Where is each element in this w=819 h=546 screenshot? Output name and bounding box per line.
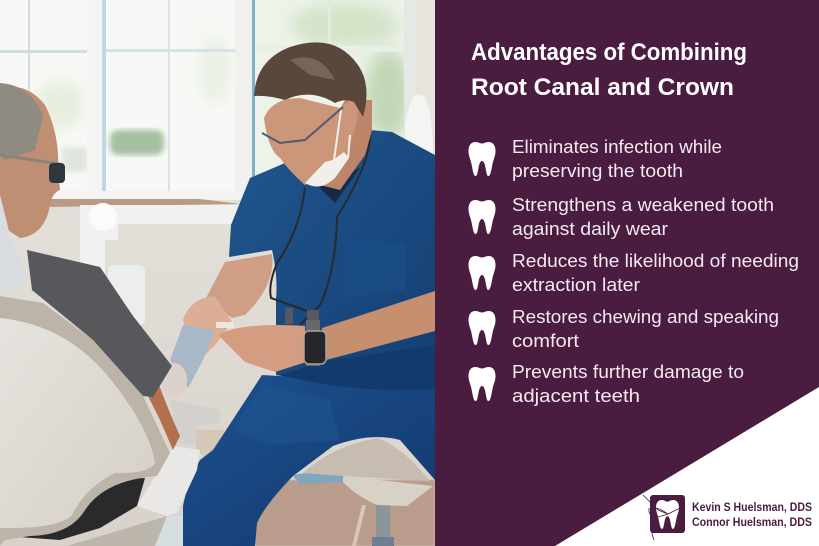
chair armrest bbox=[67, 400, 220, 546]
item 1: eliminates infection bbox=[468, 137, 722, 181]
dentist trousers bbox=[183, 375, 435, 546]
icon: logo tooth bbox=[643, 495, 685, 540]
logo: tooth with floss and practice names bbox=[643, 495, 812, 540]
practice names: Connor Huelsman, DDS bbox=[692, 517, 812, 529]
item 5: prevents damage: adjacent teeth bbox=[512, 386, 640, 406]
heading: Root Canal and Crown bbox=[471, 74, 734, 101]
item 3: reduces extraction: Reduces the likelihood of needing bbox=[512, 251, 799, 271]
item 4: restores comfort: Restores chewing and speaking bbox=[512, 307, 779, 327]
item 3: reduces extraction bbox=[468, 251, 799, 295]
dentist scrub top bbox=[229, 130, 435, 390]
heading: Advantages of Combining bbox=[471, 39, 747, 66]
item 2: strengthens tooth: Strengthens a weakened tooth bbox=[512, 195, 774, 215]
icon: tooth bbox=[468, 200, 496, 234]
patient shoe bbox=[170, 325, 215, 388]
loupe cord and loupes bbox=[270, 132, 370, 325]
dentist arms and hands holding crown bbox=[183, 254, 435, 372]
item 1: eliminates infection: Eliminates infection while bbox=[512, 137, 722, 157]
patient lower body bbox=[21, 386, 180, 540]
item 5: prevents damage: Prevents further damage to bbox=[512, 362, 744, 382]
icon: tooth bbox=[468, 256, 496, 290]
window bbox=[0, 0, 435, 207]
icon: tooth bbox=[468, 142, 496, 176]
item 2: strengthens tooth bbox=[468, 195, 774, 239]
photo: dentist showing patient a crown bbox=[0, 0, 435, 546]
advantage list bbox=[468, 137, 799, 406]
floor and lower wall bbox=[155, 430, 435, 546]
item 3: reduces extraction: extraction later bbox=[512, 275, 640, 295]
panel: purple advantages panel bbox=[435, 0, 819, 546]
item 2: strengthens tooth: against daily wear bbox=[512, 219, 668, 239]
heading bbox=[471, 39, 747, 101]
dentist head bbox=[254, 42, 372, 190]
item 4: restores comfort bbox=[468, 307, 779, 351]
patient head bbox=[0, 83, 65, 238]
icon: tooth bbox=[468, 311, 496, 345]
white corner triangle bbox=[555, 387, 819, 546]
dentist stool bbox=[293, 438, 433, 546]
practice names bbox=[692, 502, 812, 529]
dental chair headrest bbox=[0, 195, 170, 546]
wall tubing and dental unit bbox=[80, 94, 433, 325]
icon: tooth bbox=[468, 367, 496, 401]
item 4: restores comfort: comfort bbox=[512, 331, 579, 351]
item 1: eliminates infection: preserving the tooth bbox=[512, 161, 683, 181]
item 5: prevents damage bbox=[468, 362, 744, 406]
patient grey shirt bbox=[27, 250, 172, 397]
